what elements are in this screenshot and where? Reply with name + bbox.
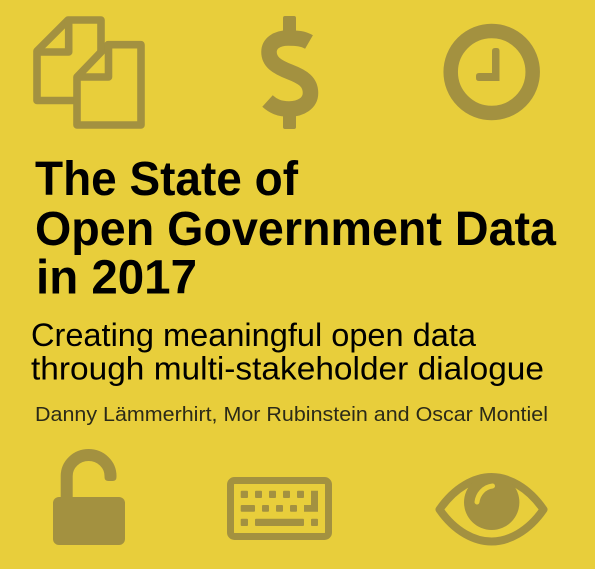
subtitle: through multi-stakeholder dialogue: [31, 350, 544, 386]
title: in 2017: [36, 252, 197, 304]
icon: open padlock: [53, 455, 125, 545]
icon: keyboard: [230, 480, 328, 536]
subtitle: Creating meaningful open data: [31, 317, 477, 353]
title: [35, 153, 556, 304]
authors: Danny Lämmerhirt, Mor Rubinstein and Oscar Montiel: [35, 403, 548, 426]
icon: documents: [37, 20, 141, 125]
icon: dollar sign: [268, 16, 310, 129]
subtitle: [31, 317, 544, 386]
icon: clock: [451, 31, 533, 113]
title: The State of: [35, 153, 299, 206]
icon: eye: [440, 475, 544, 542]
title: Open Government Data: [35, 203, 556, 256]
